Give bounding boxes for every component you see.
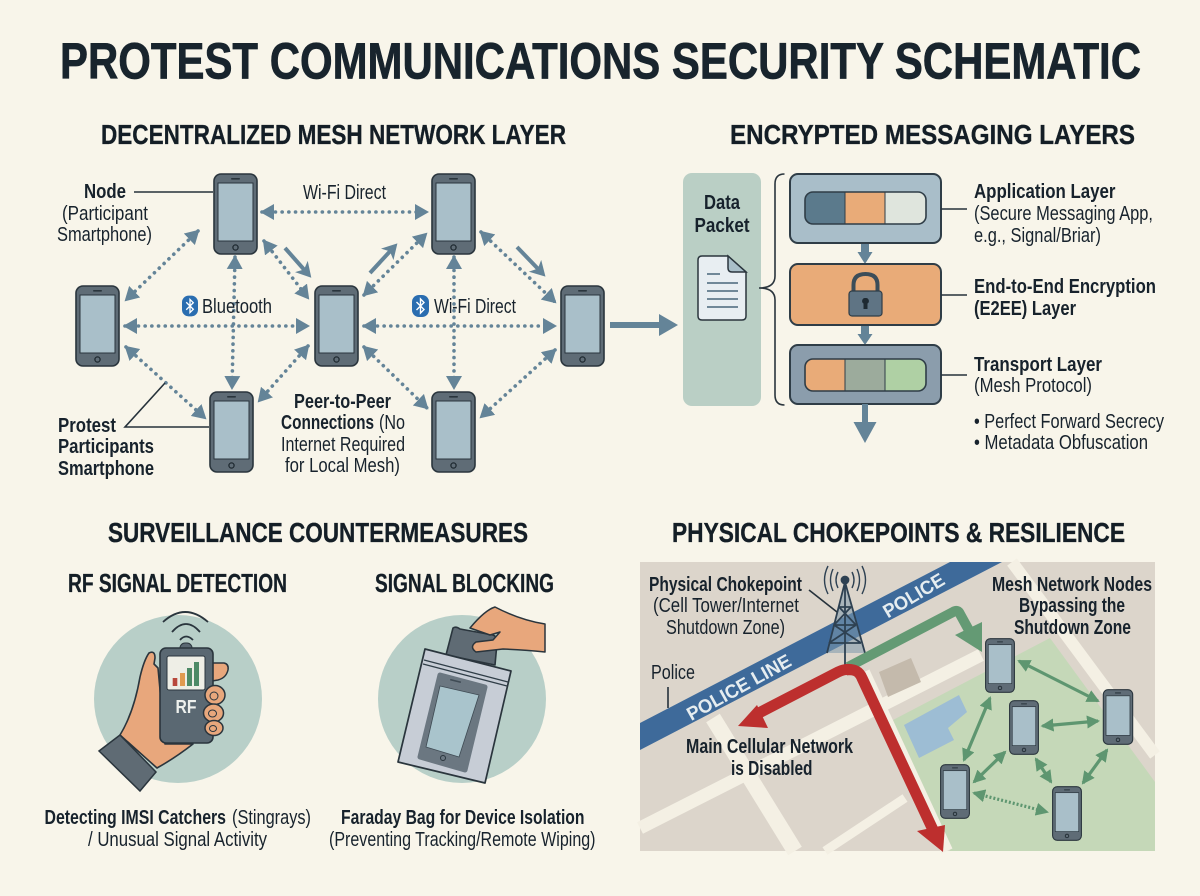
label: transport layer: Transport Layer xyxy=(974,354,1102,376)
label: mesh network nodes: Shutdown Zone xyxy=(1014,617,1131,639)
caption: imsi catchers xyxy=(44,807,311,851)
label: bluetooth wi-fi direct: Wi-Fi Direct xyxy=(434,296,516,318)
label: protest participants smartphone: Smartphone xyxy=(58,458,154,480)
green mesh arrows xyxy=(964,661,1107,812)
label: main cellular network disabled: Main Cellular Network xyxy=(686,736,854,758)
connector lines xyxy=(941,209,967,375)
panel: physical chokepoints and resilience xyxy=(640,517,1155,852)
phone nodes xyxy=(76,174,604,472)
mesh phones on map xyxy=(941,639,1133,840)
arrow: mesh to data packet xyxy=(610,314,678,336)
label: application layer: e.g., Signal/Briar) xyxy=(974,225,1101,247)
label: peer-to-peer connections: for Local Mesh) xyxy=(285,455,400,477)
label: application layer: Application Layer xyxy=(974,181,1116,203)
arrow: transport down xyxy=(854,404,876,443)
illustration: rf detector in hand xyxy=(94,612,262,791)
label: protest participants smartphone: Participants xyxy=(58,436,154,458)
label: peer-to-peer connections: Internet Required xyxy=(281,434,405,456)
label: bluetooth wi-fi direct xyxy=(412,295,516,318)
heading: encrypted messaging: ENCRYPTED MESSAGING LAYERS xyxy=(730,119,1135,150)
label: node: (Participant xyxy=(62,203,148,225)
subheading: rf signal detection: RF SIGNAL DETECTION xyxy=(68,568,287,598)
subheading: signal blocking: SIGNAL BLOCKING xyxy=(375,568,554,598)
map xyxy=(640,562,1155,852)
bullet list: • Perfect Forward Secrecy xyxy=(974,411,1164,433)
solid direction arrows xyxy=(285,247,542,274)
label: transport layer: (Mesh Protocol) xyxy=(974,375,1092,397)
label: physical chokepoint: Physical Chokepoint xyxy=(649,574,802,596)
label: main cellular network disabled xyxy=(686,736,854,780)
label: peer-to-peer connections: Peer-to-Peer xyxy=(294,391,391,413)
label: protest participants smartphone xyxy=(58,383,209,480)
label: wi-fi direct top: Wi-Fi Direct xyxy=(303,182,386,204)
layer: transport xyxy=(790,345,941,404)
park xyxy=(893,638,1155,851)
label: physical chokepoint xyxy=(649,574,837,639)
panel: decentralized mesh network layer xyxy=(57,119,604,480)
label: physical chokepoint: Shutdown Zone) xyxy=(666,617,785,639)
label: mesh network nodes xyxy=(992,574,1152,639)
layer: end-to-end encryption xyxy=(790,264,941,325)
label: e2ee layer: End-to-End Encryption xyxy=(974,276,1156,298)
label: transport layer xyxy=(974,354,1102,397)
caption: faraday bag: Faraday Bag for Device Isolation xyxy=(341,807,584,829)
arrow: application to encryption xyxy=(858,243,872,264)
panel: encrypted messaging layers xyxy=(683,119,1164,454)
arrow: encryption to transport xyxy=(858,325,872,345)
police line band xyxy=(640,562,1002,750)
police line band: POLICE LINE xyxy=(684,651,795,725)
label: police: Police xyxy=(651,662,695,684)
label: police xyxy=(651,662,695,708)
caption: faraday bag xyxy=(329,807,596,851)
data packet column: Packet xyxy=(694,215,750,237)
panel: surveillance countermeasures xyxy=(44,517,596,851)
label: physical chokepoint: (Cell Tower/Internet xyxy=(653,595,799,617)
layer: application xyxy=(790,174,941,243)
arrow: green bypass xyxy=(848,611,971,667)
bullet list: • Metadata Obfuscation xyxy=(974,432,1148,454)
caption: faraday bag: (Preventing Tracking/Remote Wiping) xyxy=(329,829,596,851)
label: e2ee layer xyxy=(974,276,1156,320)
illustration: rf detector in hand: RF xyxy=(176,697,196,717)
data packet column: Data xyxy=(704,192,741,214)
label: protest participants smartphone: Protest xyxy=(58,415,116,437)
icon: document xyxy=(698,256,746,320)
label: e2ee layer: (E2EE) Layer xyxy=(974,298,1076,320)
label: peer-to-peer connections xyxy=(281,391,405,477)
heading: surveillance: SURVEILLANCE COUNTERMEASURES xyxy=(108,517,528,548)
label: mesh network nodes: Bypassing the xyxy=(1019,595,1125,617)
water xyxy=(904,695,967,758)
label: application layer xyxy=(974,181,1153,247)
illustration: faraday bag xyxy=(378,607,546,783)
police line band: POLICE xyxy=(880,570,949,623)
heading: mesh network: DECENTRALIZED MESH NETWORK LAYER xyxy=(101,119,566,150)
label: peer-to-peer connections: (No xyxy=(379,412,405,434)
label: node: Node xyxy=(84,181,126,203)
label: node: Smartphone) xyxy=(57,224,152,246)
caption: imsi catchers: Detecting IMSI Catchers xyxy=(44,807,226,829)
arrow: red disabled network xyxy=(738,669,945,852)
brace xyxy=(759,174,784,405)
caption: imsi catchers: / Unusual Signal Activity xyxy=(88,829,267,851)
dotted peer connections xyxy=(125,212,555,418)
label: main cellular network disabled: is Disabled xyxy=(731,758,812,780)
icon: padlock xyxy=(849,274,882,316)
building xyxy=(879,658,921,697)
label: peer-to-peer connections: Connections xyxy=(281,412,374,434)
label: mesh network nodes: Mesh Network Nodes xyxy=(992,574,1152,596)
label: application layer: (Secure Messaging App, xyxy=(974,203,1153,225)
caption: imsi catchers: (Stingrays) xyxy=(232,807,311,829)
label: node xyxy=(57,181,213,246)
icon: cell tower xyxy=(824,566,866,665)
data packet column xyxy=(683,173,761,406)
label: bluetooth: Bluetooth xyxy=(202,296,272,318)
label: bluetooth xyxy=(182,296,272,318)
bullet list xyxy=(974,411,1164,454)
